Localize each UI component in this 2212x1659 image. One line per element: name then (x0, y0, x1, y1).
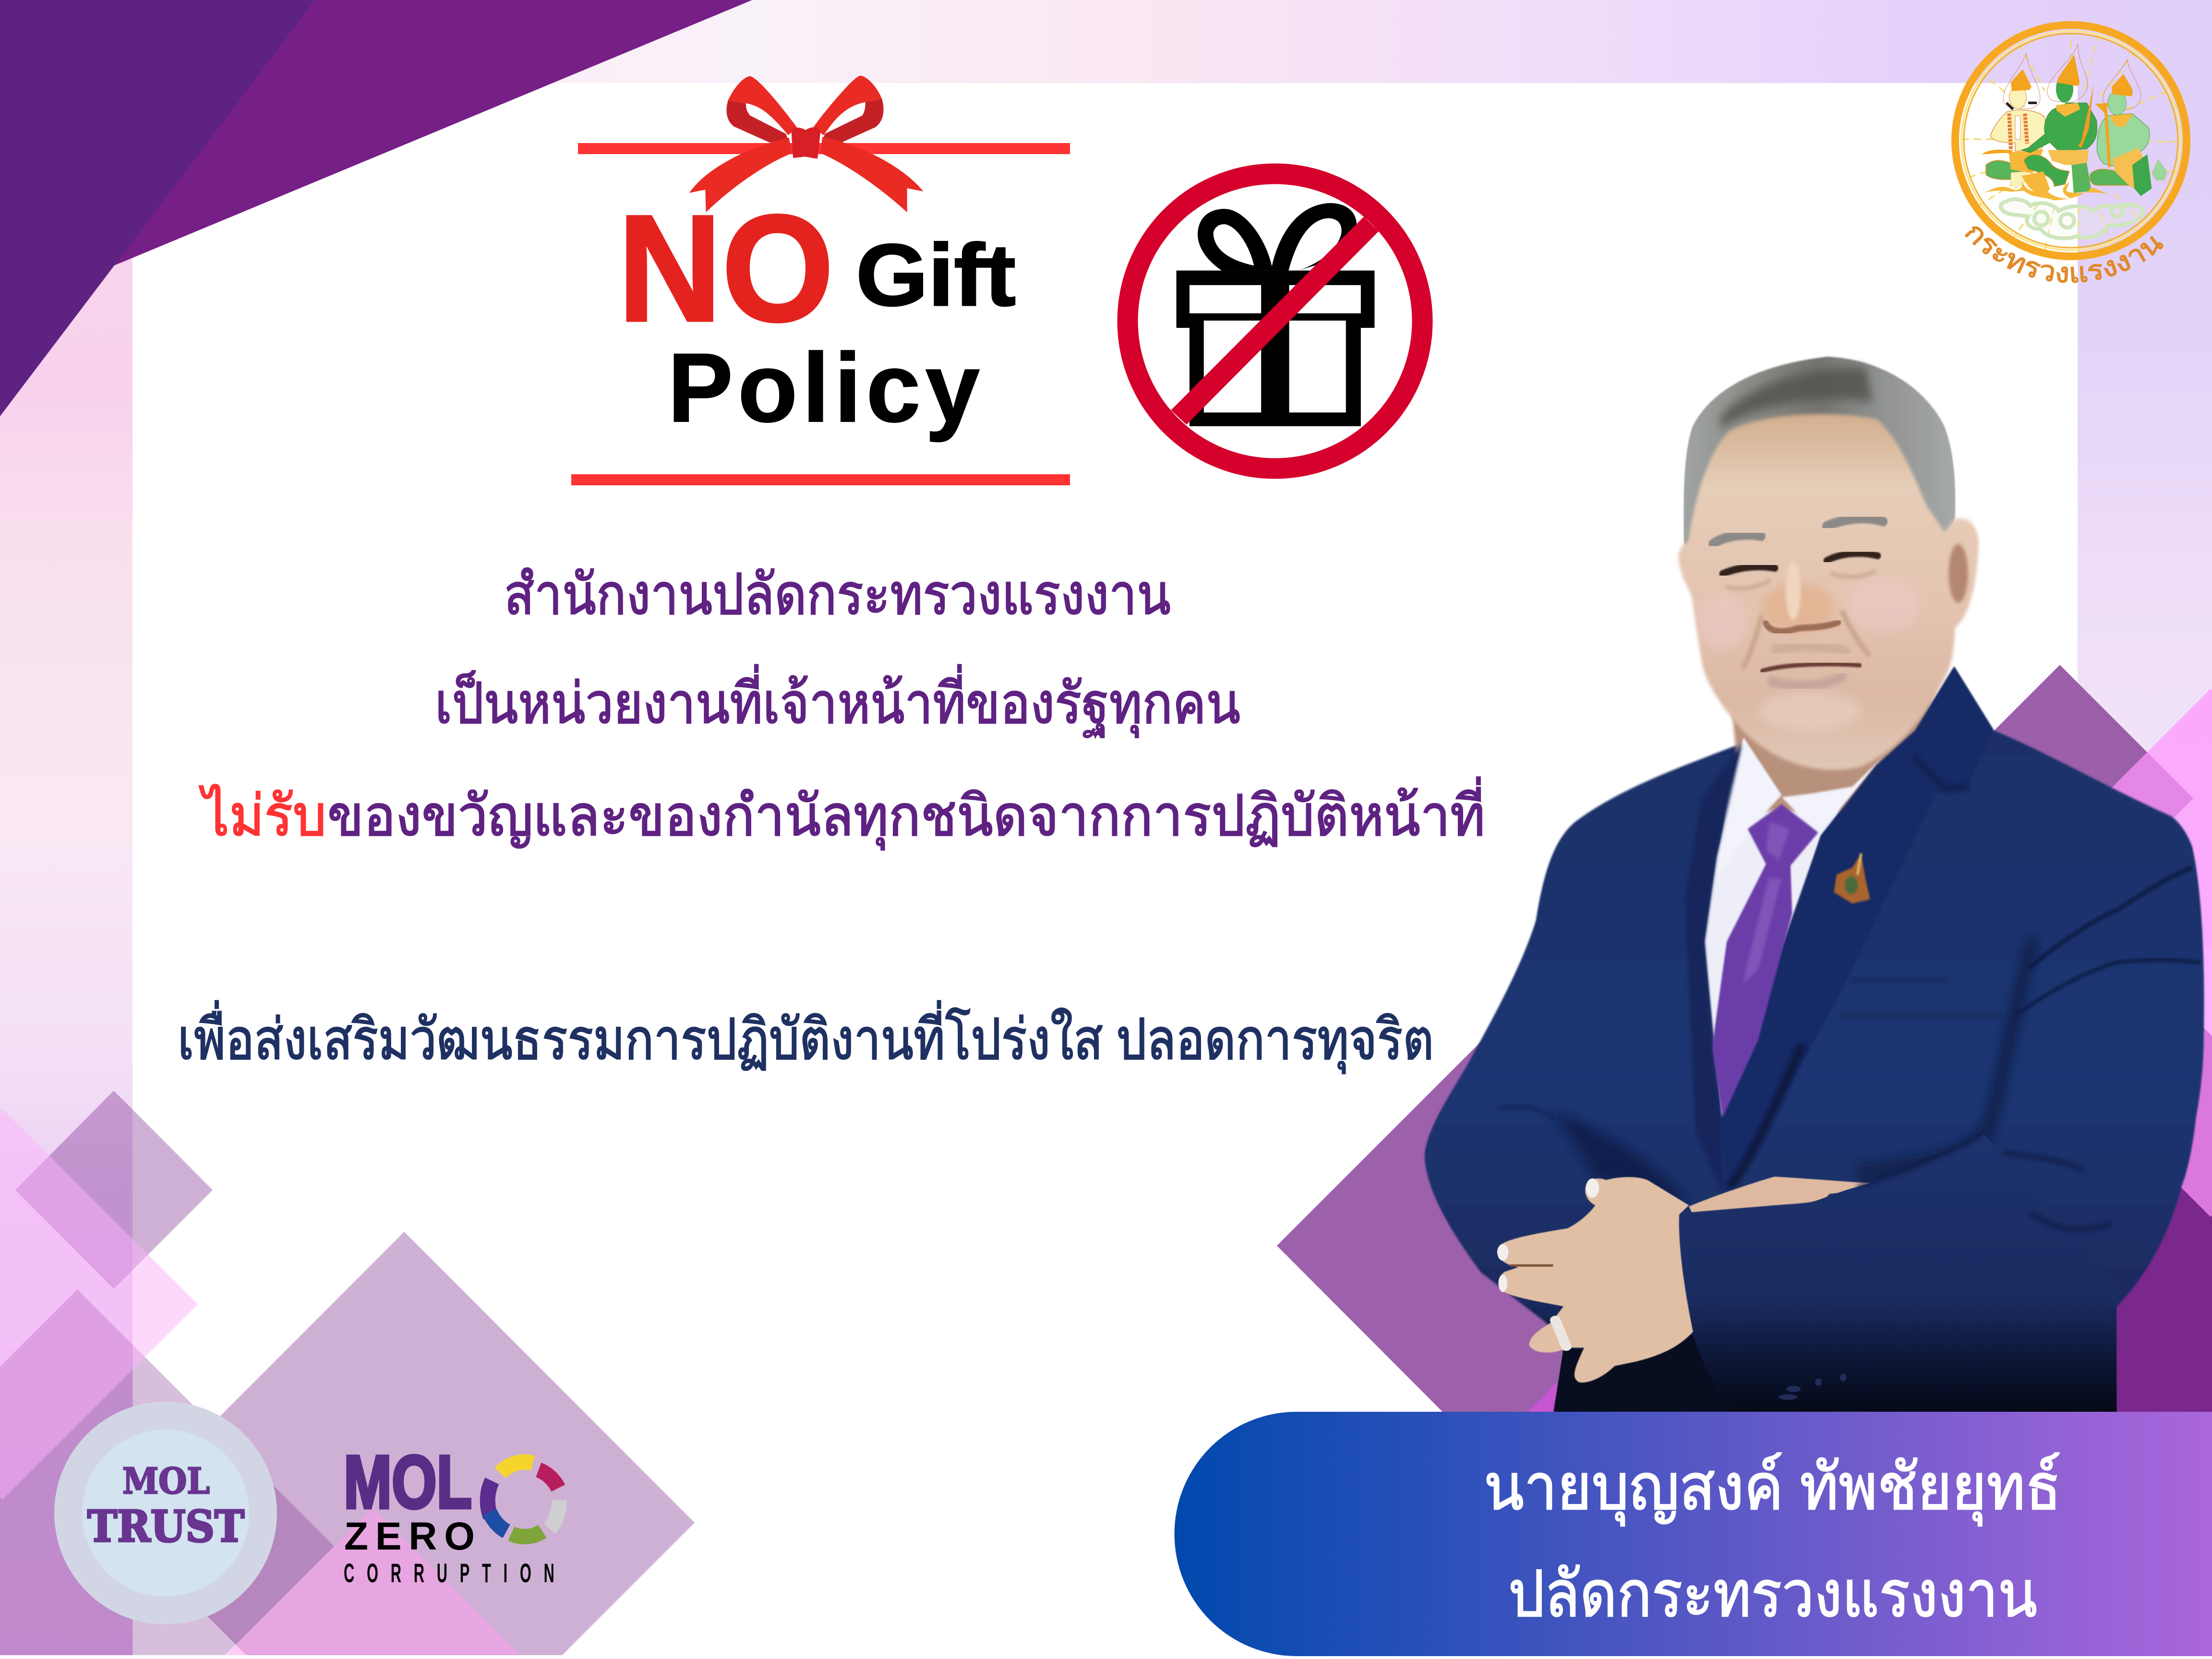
text block: policy statement: ของขวัญและของกำนัลทุกชนิดจากการปฏิบัติหน้าที่ (327, 777, 1485, 851)
lapels (1721, 667, 1994, 1199)
logo: MOL Zero Corruption: ZERO (344, 1515, 475, 1558)
text block: policy statement: สำนักงานปลัดกระทรวงแรงงาน (504, 563, 1171, 626)
icon: red bow (689, 76, 923, 212)
left figure (1990, 110, 2045, 151)
hand (1497, 1177, 1693, 1382)
features (1713, 518, 1883, 686)
logo: MOL Zero Corruption (344, 1441, 559, 1588)
lapel pin (1834, 854, 1870, 903)
collar (1718, 737, 1883, 878)
heading: NO: NO (618, 183, 834, 353)
top-left corner purple shapes (0, 0, 752, 416)
shirt (1704, 743, 1876, 1118)
tie (1712, 804, 1818, 1118)
forearm folds (1857, 1134, 2110, 1229)
upper hand fingertips (1689, 1177, 1875, 1212)
torso shadow above arm (1554, 1109, 1692, 1203)
lower jacket (1554, 1335, 1733, 1412)
right figure (2097, 114, 2150, 166)
heading: Policy: Policy (668, 333, 980, 443)
name banner (1174, 1412, 2212, 1656)
name: นายบุญสงค์ ทัพชัยยุทธ์ (1484, 1452, 2061, 1526)
ribbon line top (578, 143, 1070, 154)
logo: MOL TRUST badge (54, 1402, 277, 1624)
position: ปลัดกระทรวงแรงงาน (1508, 1559, 2037, 1630)
ribbon line bottom (571, 474, 1070, 485)
text block: purpose: เพื่อส่งเสริมวัฒนธรรมการปฏิบัติงานที่โปร่งใส ปลอดการทุจริต (178, 1000, 1434, 1074)
heading: Gift: Gift (856, 226, 1016, 324)
right decorative diamonds (1277, 665, 2212, 1412)
photo: speaker portrait (1425, 357, 2204, 1412)
icon: no gift sign (1128, 174, 1422, 469)
text block: policy statement: เป็นหน่วยงานที่เจ้าหน้าที่ของรัฐทุกคน (435, 664, 1240, 738)
lapel edge shadow (1730, 1045, 1802, 1187)
suit (1425, 667, 2204, 1412)
sleeve buttons (1779, 1374, 1847, 1400)
emblem: Ministry of Labour seal (1951, 21, 2190, 283)
head (1679, 357, 1979, 811)
face shading (1699, 544, 1968, 730)
right forearm sleeve (1679, 1134, 2116, 1412)
text block: policy statement: ไม่รับ (199, 784, 326, 848)
middle figure (2022, 103, 2097, 153)
text block: policy statement (199, 563, 1485, 851)
clouds (2001, 199, 2143, 238)
logo: MOL Zero Corruption: MOL (344, 1441, 472, 1524)
logo: MOL TRUST badge: MOL (122, 1461, 210, 1502)
emblem: Ministry of Labour seal: กระทรวงแรงงาน (1964, 226, 2164, 283)
shading and folds (1842, 758, 2200, 1174)
logo: MOL TRUST badge: TRUST (87, 1501, 244, 1552)
bottom-left decorative diamonds (0, 1091, 695, 1655)
logo: MOL Zero Corruption: CORRUPTION (344, 1558, 554, 1588)
